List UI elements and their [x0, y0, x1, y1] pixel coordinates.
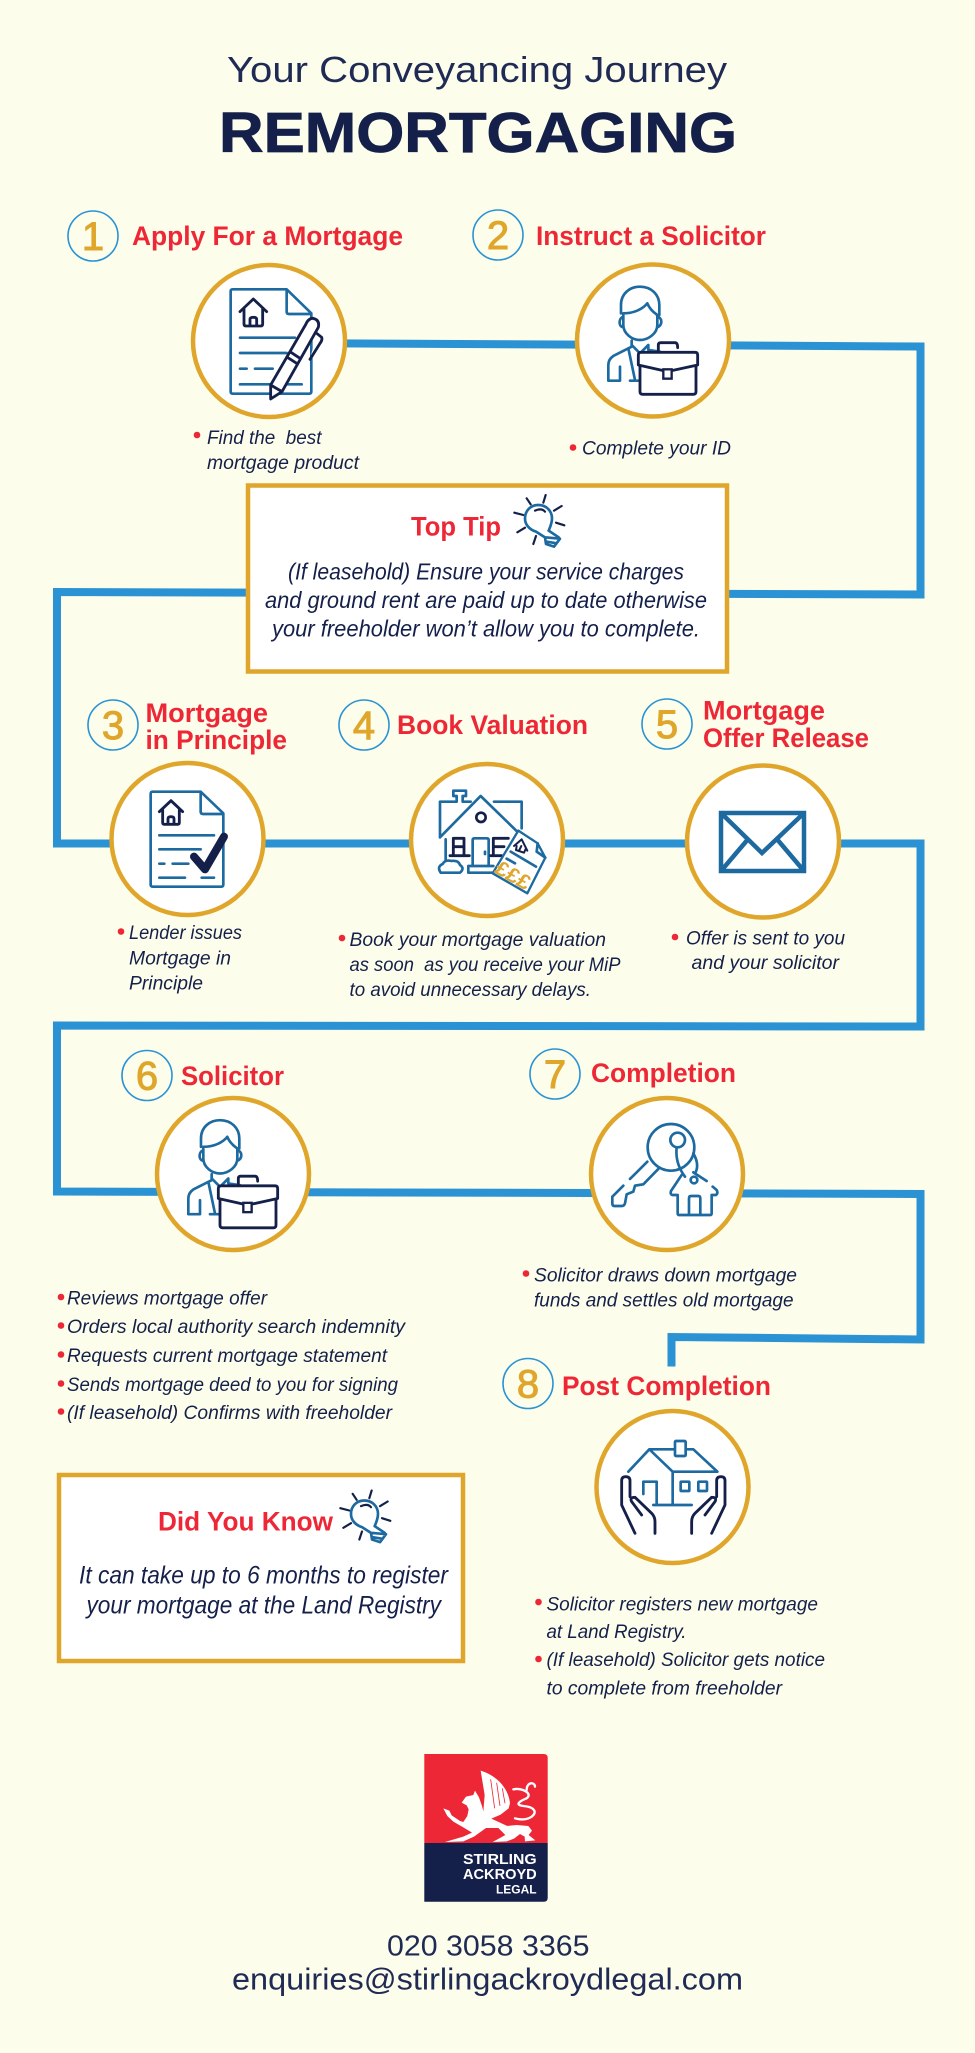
- icon: key with house fob: [591, 1098, 743, 1250]
- tip text: and ground rent are paid up to date otherwise: [265, 587, 707, 613]
- tip text: [265, 558, 707, 642]
- heading: Mortgage Offer Release: Mortgage: [703, 696, 825, 726]
- heading: Mortgage in Principle: [146, 698, 287, 755]
- step 3: Mortgage in Principle: [88, 698, 287, 994]
- heading: Book Valuation: Book Valuation: [397, 710, 588, 740]
- logo wordmark: STIRLING: [463, 1851, 537, 1868]
- number badge 8: [503, 1358, 553, 1408]
- heading: Completion: Completion: [591, 1058, 736, 1088]
- bullet text: Find the best: [207, 427, 323, 449]
- bullet text: [194, 427, 361, 474]
- step 5: Mortgage Offer Release: [642, 696, 869, 974]
- bullet text: Principle: [129, 972, 203, 994]
- bullet text: Mortgage in: [129, 948, 231, 970]
- bullet list: [535, 1594, 825, 1700]
- bullet text: Book your mortgage valuation: [350, 929, 606, 951]
- number badge 7: 7: [544, 1053, 566, 1097]
- bullet list: Solicitor registers new mortgage: [546, 1594, 818, 1616]
- bullet list: to complete from freeholder: [546, 1678, 783, 1700]
- contact details: [232, 1930, 743, 1996]
- fact text: It can take up to 6 months to register: [79, 1562, 450, 1590]
- logo wordmark: ACKROYD: [463, 1866, 537, 1883]
- heading: Apply For a Mortgage: Apply For a Mortgage: [132, 221, 403, 251]
- number badge 4: 4: [353, 704, 375, 748]
- icon: light bulb: [514, 495, 564, 547]
- bullet text: to avoid unnecessary delays.: [350, 979, 591, 1001]
- contact details: enquiries@stirlingackroydlegal.com: [232, 1962, 743, 1996]
- panel: did you know: [59, 1475, 463, 1661]
- bullet list: Orders local authority search indemnity: [67, 1316, 406, 1338]
- bullet text: Complete your ID: [582, 438, 731, 460]
- step 7: Completion: [523, 1049, 797, 1312]
- heading: Mortgage Offer Release: Offer Release: [703, 723, 869, 753]
- heading: Instruct a Solicitor: Instruct a Solicitor: [536, 221, 766, 251]
- logo wordmark: LEGAL: [496, 1883, 536, 1897]
- icon: envelope: [687, 766, 839, 918]
- number badge 5: [642, 699, 692, 749]
- title: [219, 49, 737, 165]
- number badge 6: 6: [136, 1054, 158, 1098]
- number badge 4: [339, 700, 389, 750]
- bullet text: and your solicitor: [692, 952, 841, 974]
- heading: Mortgage in Principle: in Principle: [146, 725, 287, 755]
- icon: house with price tag: £££: [491, 856, 535, 895]
- heading: Top Tip: Top Tip: [411, 512, 501, 542]
- tip text: your freeholder won’t allow you to complete.: [270, 616, 700, 642]
- icon: hands holding house: [596, 1411, 748, 1563]
- bullet text: [118, 922, 242, 994]
- number badge 1: [68, 211, 118, 261]
- bullet text: funds and settles old mortgage: [534, 1290, 794, 1312]
- icon: solicitor with briefcase: [157, 1098, 309, 1250]
- tip text: (If leasehold) Ensure your service charges: [288, 558, 684, 584]
- bullet text: Offer is sent to you: [686, 928, 845, 950]
- logo: Stirling Ackroyd Legal: [424, 1754, 548, 1902]
- bullet list: at Land Registry.: [546, 1621, 686, 1643]
- step 2: Instruct a Solicitor: [473, 210, 766, 460]
- bullet text: [672, 928, 845, 974]
- step 4: Book Valuation: [339, 700, 620, 1001]
- step 1: Apply For a Mortgage: [68, 211, 403, 474]
- bullet text: Lender issues: [129, 922, 242, 944]
- bullet text: [523, 1264, 797, 1312]
- icon: document and pen: [193, 265, 345, 417]
- number badge 1: 1: [82, 215, 104, 259]
- heading: Post Completion: Post Completion: [562, 1371, 771, 1401]
- bullet list: (If leasehold) Solicitor gets notice: [546, 1649, 825, 1671]
- step 8: Post Completion: [503, 1358, 825, 1700]
- step 6: Solicitor: [58, 1050, 406, 1424]
- icon: document with tick: [112, 763, 264, 915]
- contact details: 020 3058 3365: [387, 1930, 590, 1962]
- number badge 5: 5: [656, 703, 678, 747]
- bullet list: [58, 1288, 406, 1424]
- icon: light bulb: [340, 1490, 390, 1542]
- title: REMORTGAGING: [219, 101, 737, 165]
- connector line: [57, 343, 920, 1366]
- icon: solicitor with briefcase: [577, 264, 729, 416]
- number badge 3: [88, 700, 138, 750]
- bullet text: Solicitor draws down mortgage: [534, 1264, 797, 1286]
- bullet text: mortgage product: [207, 452, 361, 474]
- heading: Mortgage in Principle: Mortgage: [146, 698, 268, 728]
- number badge 7: [530, 1049, 580, 1099]
- heading: Mortgage Offer Release: [703, 696, 869, 753]
- number badge 3: 3: [102, 704, 124, 748]
- bullet list: Sends mortgage deed to you for signing: [67, 1374, 398, 1396]
- fact text: [79, 1562, 450, 1620]
- number badge 2: [473, 210, 523, 260]
- panel: top tip: [248, 486, 727, 672]
- bullet list: Requests current mortgage statement: [67, 1345, 389, 1367]
- number badge 6: [122, 1050, 172, 1100]
- heading: Solicitor: Solicitor: [181, 1061, 284, 1091]
- number badge 2: 2: [487, 214, 509, 258]
- title: Your Conveyancing Journey: [227, 49, 727, 90]
- number badge 8: 8: [517, 1362, 539, 1406]
- bullet list: Reviews mortgage offer: [67, 1288, 268, 1310]
- bullet list: (If leasehold) Confirms with freeholder: [67, 1402, 393, 1424]
- griffin emblem: [443, 1771, 535, 1842]
- bullet text: as soon as you receive your MiP: [350, 954, 620, 976]
- fact text: your mortgage at the Land Registry: [85, 1592, 442, 1620]
- bullet text: [339, 929, 620, 1001]
- icon: house with price tag: [411, 764, 563, 916]
- logo wordmark: [463, 1851, 537, 1897]
- heading: Did You Know: Did You Know: [158, 1506, 333, 1536]
